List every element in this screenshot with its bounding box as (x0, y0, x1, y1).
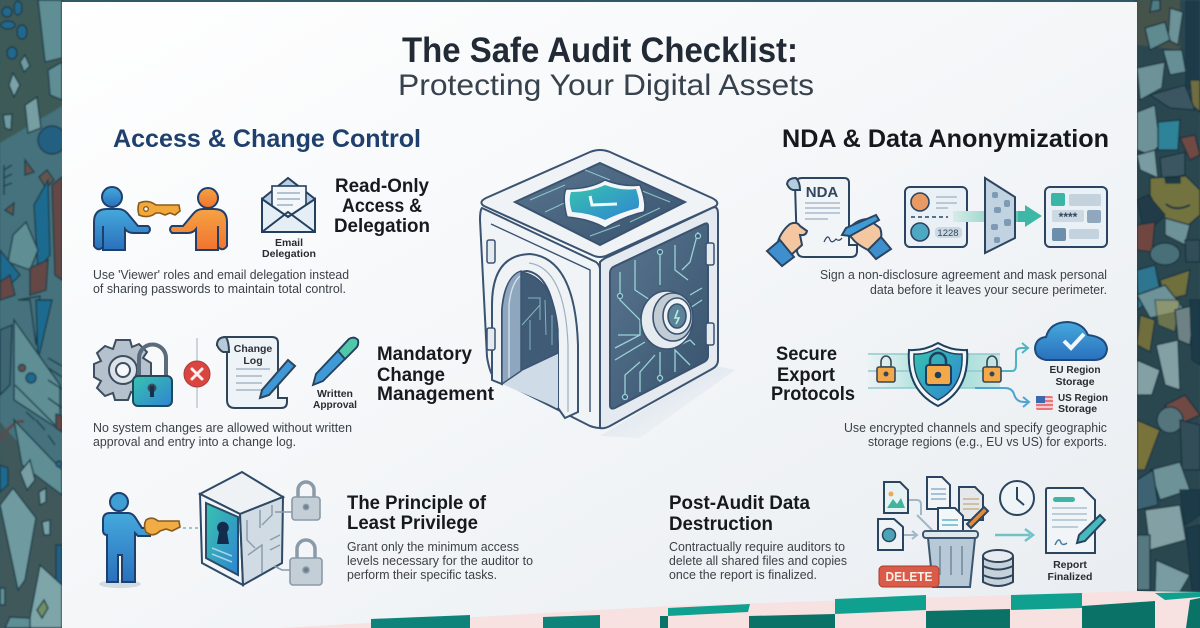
text: destruction description: once the report is finalized. (669, 567, 817, 582)
title: Protecting Your Digital Assets (398, 69, 814, 102)
icon: US flag (1036, 396, 1053, 410)
icon: change log scroll: Change (234, 343, 272, 355)
icon: red cross (184, 361, 210, 387)
safe top face (481, 150, 717, 257)
title: secure export protocols: Secure (776, 344, 837, 365)
text: read-only description (93, 267, 349, 296)
heading: access and change control: Access & Change Control (113, 125, 421, 153)
text: least privilege description: levels necessary for the auditor to (347, 553, 533, 568)
text: destruction description (669, 539, 847, 582)
doodle background: left strip (0, 0, 66, 628)
icon: clock (1000, 481, 1034, 515)
icon: masked data card: **** (1059, 210, 1078, 224)
text: least privilege description: perform their specific tasks. (347, 567, 497, 582)
safe left face (480, 208, 600, 428)
icon: shield with padlock (909, 343, 967, 406)
text: change management description: approval and entry into a change log. (93, 434, 296, 449)
title: read-only access and delegation (334, 176, 430, 237)
icon: gear with padlock (94, 340, 172, 406)
icon: small padlocks (877, 356, 1001, 382)
label: email delegation: Delegation (262, 248, 316, 260)
safe right face (600, 207, 718, 428)
title: mandatory change management: Mandatory (377, 344, 472, 365)
delete button (879, 566, 939, 587)
text: change management description: No system changes are allowed without written (93, 420, 352, 435)
title: post-audit data destruction: Post-Audit Data (669, 493, 810, 514)
text: least privilege description (347, 539, 533, 582)
label: EU region storage: Storage (1055, 376, 1095, 388)
icon: grey padlocks (274, 482, 322, 585)
section: secure export protocols (771, 322, 1108, 449)
icon: change log scroll (217, 337, 295, 408)
title: read-only access and delegation: Delegation (334, 216, 430, 237)
section: NDA and anonymization (767, 178, 1107, 297)
title: post-audit data destruction: Destruction (669, 514, 773, 535)
shield badge (564, 180, 645, 228)
icon: anonymization filter with arrow (953, 178, 1042, 253)
title: read-only access and delegation: Read-Only (335, 176, 429, 197)
icon: signed NDA scroll (767, 178, 891, 266)
text: destruction description: delete all shared files and copies (669, 553, 847, 568)
channels and routing arrows (868, 343, 1029, 407)
label: written approval: Written (317, 388, 353, 400)
doodle background: right strip (1135, 0, 1200, 628)
icon: written approval pen (313, 338, 358, 385)
icon: envelope (262, 178, 315, 232)
icon: finalized report (1046, 488, 1105, 553)
delete button: DELETE (886, 569, 933, 584)
title: mandatory change management: Management (377, 384, 495, 405)
dotted access beam (183, 511, 220, 552)
title: principle of least privilege (347, 493, 487, 534)
text: destruction description: Contractually require auditors to (669, 539, 845, 554)
text: export description (844, 420, 1107, 449)
text: NDA description: Sign a non-disclosure agreement and mask personal (820, 267, 1107, 282)
icon: masked data card (1045, 187, 1107, 247)
section: read-only access (93, 176, 430, 296)
text: export description: storage regions (e.g., EU vs US) for exports. (868, 434, 1107, 449)
label: US region storage (1058, 392, 1108, 415)
arrow to report (995, 529, 1033, 541)
combination dial (641, 291, 693, 349)
title: mandatory change management (377, 344, 495, 405)
section: post-audit data destruction (669, 477, 1105, 587)
arched door (492, 254, 578, 418)
text: read-only description: Use 'Viewer' roles and email delegation instead (93, 267, 349, 282)
text: change management description (93, 420, 352, 449)
door hinges (487, 240, 714, 350)
checkered floor band (280, 591, 1200, 628)
text: NDA description: data before it leaves your secure perimeter. (870, 282, 1107, 297)
label: US region storage: Storage (1058, 403, 1097, 415)
icon: database (983, 550, 1013, 586)
label: report finalized (1048, 559, 1092, 583)
title: secure export protocols: Export (777, 365, 836, 386)
label: email delegation: Email (275, 237, 303, 249)
icon: change log scroll: Log (243, 355, 263, 367)
title (398, 31, 814, 102)
heading: NDA and data anonymization: NDA & Data Anonymization (782, 125, 1109, 153)
label: written approval (313, 388, 357, 411)
icon: server cube with keyhole (200, 472, 283, 585)
text: export description: Use encrypted channels and specify geographic (844, 420, 1107, 435)
icon: person with key (99, 493, 180, 588)
label: report finalized: Finalized (1048, 571, 1092, 583)
icon: trash can (923, 531, 978, 587)
label: EU region storage (1050, 364, 1100, 388)
title: mandatory change management: Change (377, 365, 445, 386)
title: The Safe Audit Checklist: (402, 31, 798, 70)
icon: person handing key (94, 187, 227, 250)
title: principle of least privilege: Least Privilege (347, 513, 478, 534)
label: email delegation (262, 237, 316, 260)
text: least privilege description: Grant only the minimum access (347, 539, 519, 554)
icon: data card: 1228 (937, 228, 959, 239)
title: post-audit data destruction (669, 493, 810, 535)
title: secure export protocols: Protocols (771, 384, 855, 405)
icon: data card (905, 187, 967, 247)
title: read-only access and delegation: Access & (342, 196, 422, 217)
title: secure export protocols (771, 344, 855, 405)
label: written approval: Approval (313, 399, 357, 411)
icon: signed NDA scroll: NDA (806, 184, 838, 201)
icon: documents falling into trash (878, 477, 988, 550)
label: US region storage: US Region (1058, 392, 1108, 404)
section: mandatory change management (93, 337, 495, 449)
title: principle of least privilege: The Principle of (347, 493, 487, 514)
divider (196, 338, 198, 408)
section: principle of least privilege (99, 472, 533, 588)
label: report finalized: Report (1053, 559, 1087, 571)
icon: cloud with check (1035, 322, 1107, 360)
text: NDA description (820, 267, 1107, 297)
text: read-only description: of sharing passwords to maintain total control. (93, 281, 346, 296)
label: EU region storage: EU Region (1050, 364, 1100, 376)
central safe illustration (480, 150, 735, 438)
